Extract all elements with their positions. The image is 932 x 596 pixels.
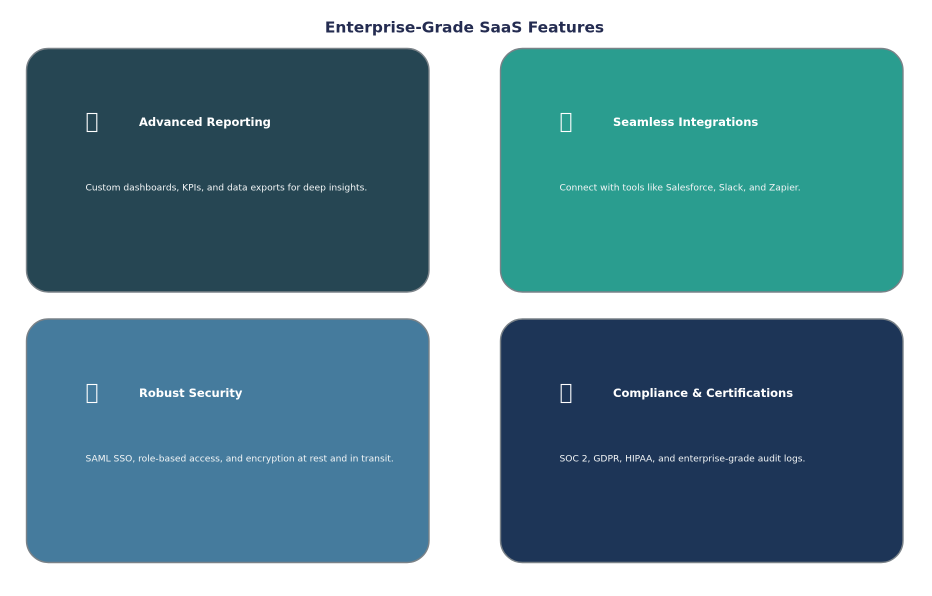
- description: Connect with tools like Salesforce, Slack, and Zapier.: [560, 184, 801, 194]
- panel: compliance and certifications: [500, 319, 903, 562]
- icon: missing glyph box: [87, 114, 97, 132]
- card background: [500, 48, 903, 292]
- heading: Advanced Reporting: [139, 115, 271, 129]
- description: Custom dashboards, KPIs, and data exports for deep insights.: [86, 184, 367, 194]
- card background: [26, 319, 429, 562]
- panel: robust security: [26, 319, 429, 562]
- heading: Seamless Integrations: [613, 115, 758, 129]
- heading: Robust Security: [139, 386, 243, 400]
- heading: Compliance & Certifications: [613, 386, 793, 400]
- panel: advanced reporting: [26, 48, 429, 292]
- description: SOC 2, GDPR, HIPAA, and enterprise-grade audit logs.: [560, 454, 805, 464]
- icon: missing glyph box: [561, 384, 571, 402]
- icon: missing glyph box: [561, 114, 571, 132]
- icon: missing glyph box: [87, 384, 97, 402]
- card background: [26, 48, 429, 292]
- card background: [500, 319, 903, 562]
- description: SAML SSO, role-based access, and encryption at rest and in transit.: [86, 454, 394, 464]
- title: Enterprise-Grade SaaS Features: [325, 19, 604, 37]
- panel: seamless integrations: [500, 48, 903, 292]
